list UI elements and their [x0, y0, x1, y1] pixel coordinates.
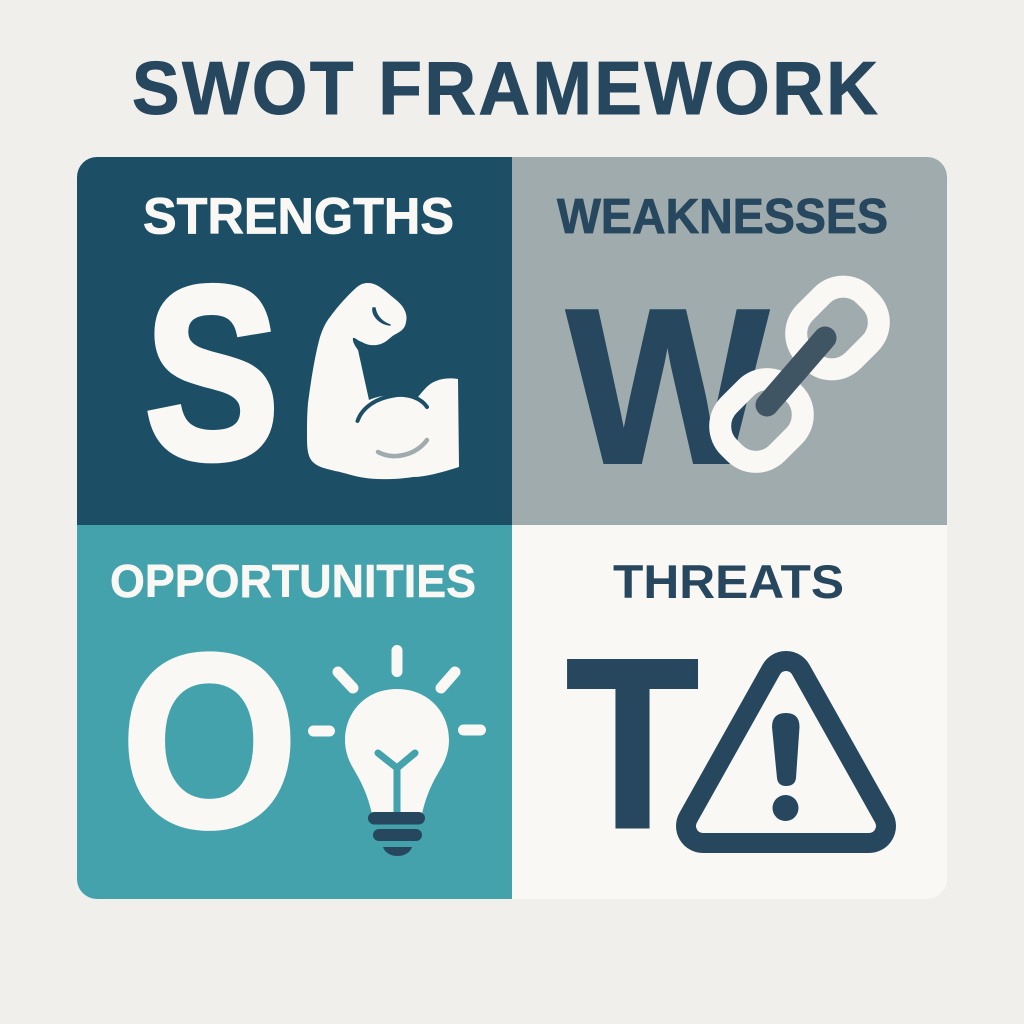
icon: flexed arm: [307, 283, 459, 479]
icon: warning triangle: [686, 661, 886, 843]
icon: light bulb: [314, 650, 480, 856]
title: SWOT FRAMEWORK: [132, 47, 878, 130]
heading: strengths: STRENGTHS: [143, 188, 454, 244]
panel: weaknesses background: [512, 157, 947, 525]
letter T: T: [566, 608, 699, 879]
heading: opportunities: OPPORTUNITIES: [110, 555, 476, 607]
letter W: W: [566, 263, 770, 511]
letter S: S: [145, 237, 279, 510]
heading: weaknesses: WEAKNESSES: [557, 190, 888, 244]
letter O: O: [121, 603, 298, 880]
panel: strengths background: [77, 157, 512, 525]
heading: threats: THREATS: [613, 555, 844, 608]
panel: matrix: [77, 157, 947, 899]
panel: opportunities background: [77, 525, 512, 899]
panel: threats background: [512, 525, 947, 899]
icon: broken chain link: [708, 274, 891, 474]
